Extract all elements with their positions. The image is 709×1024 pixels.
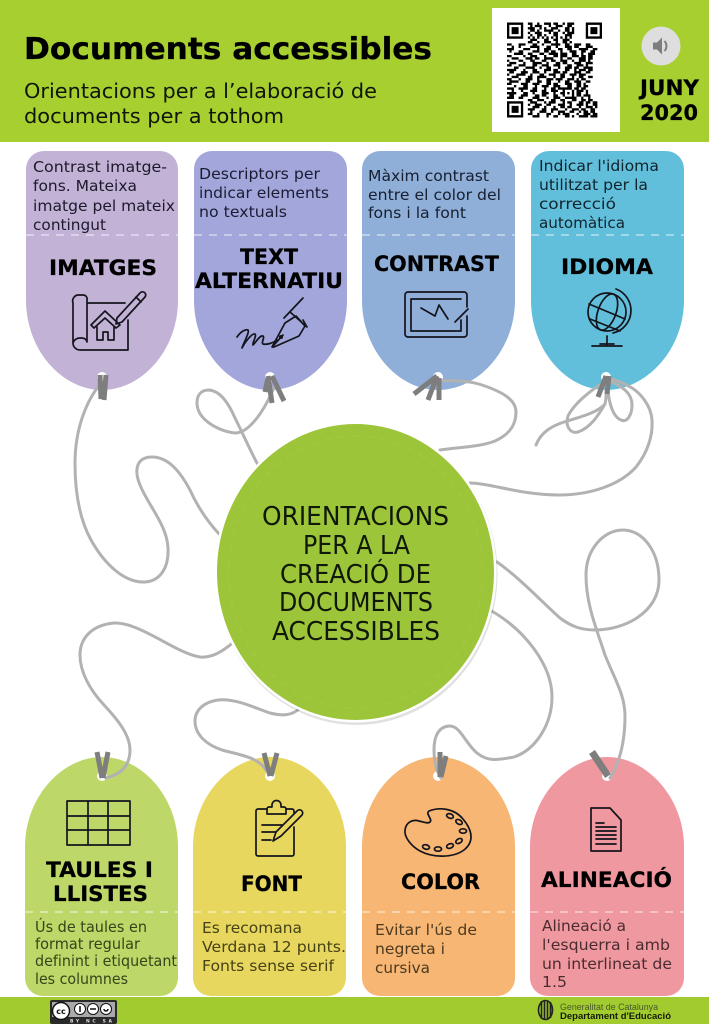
header band — [0, 0, 709, 142]
heading: contrast: CONTRAST — [374, 252, 500, 276]
panel: text alternatiu — [194, 151, 347, 390]
central text: CREACIÓ DE — [280, 558, 431, 590]
description: alineacio: l'esquerra i amb — [542, 936, 670, 954]
description: contrast: entre el color del — [368, 186, 501, 204]
heading: text alternatiu — [195, 245, 343, 293]
icon: speaker button — [642, 26, 680, 66]
description: taules i llistes — [35, 917, 177, 988]
description: contrast: Màxim contrast — [368, 167, 489, 185]
central text: DOCUMENTS — [279, 588, 433, 618]
panel: idioma — [531, 151, 684, 390]
description: idioma: automàtica — [539, 214, 625, 232]
description: imatges: contingut — [33, 216, 106, 234]
description: color: cursiva — [375, 959, 430, 977]
icon: table — [67, 801, 130, 845]
panel: imatges — [26, 151, 178, 390]
heading: imatges: IMATGES — [49, 256, 157, 280]
heading: color: COLOR — [401, 870, 480, 894]
strings connecting tags to centre — [75, 378, 659, 778]
central text — [262, 502, 449, 647]
description: text alternatiu: indicar elements — [199, 184, 329, 202]
heading: taules i llistes: LLISTES — [53, 882, 148, 906]
description: imatges: imatge pel mateix — [33, 197, 175, 215]
footer institution text: Generalitat de Catalunya — [560, 1002, 658, 1012]
central text: ACCESSIBLES — [272, 617, 440, 647]
description: contrast: fons i la font — [368, 204, 466, 222]
description: taules i llistes: definint i etiquetant — [35, 952, 177, 970]
description: text alternatiu — [199, 165, 329, 221]
footer institution text — [560, 1002, 671, 1022]
icon: clipboard — [256, 800, 303, 856]
panel: contrast — [362, 151, 515, 390]
heading: text alternatiu: ALTERNATIU — [195, 269, 343, 293]
central text: ORIENTACIONS — [262, 502, 449, 532]
date: JUNY — [638, 76, 700, 100]
description: imatges — [33, 158, 175, 234]
description: taules i llistes: format regular — [35, 935, 141, 953]
icon: creative commons badge: cc — [56, 1007, 66, 1016]
subtitle: Orientacions per a l’elaboració de — [24, 79, 377, 103]
description: idioma — [539, 157, 659, 232]
description: taules i llistes: Ús de taules en — [35, 917, 147, 936]
description: alineacio: un interlineat de — [542, 955, 672, 973]
heading: alineacio: ALINEACIÓ — [541, 867, 672, 892]
heading: font: FONT — [241, 872, 303, 896]
description: color: negreta i — [375, 940, 445, 958]
description: alineacio: 1.5 — [542, 973, 567, 991]
icon: palette — [405, 809, 471, 856]
description: text alternatiu: Descriptors per — [199, 165, 321, 183]
central circle — [214, 422, 498, 725]
description: imatges: Contrast imatge- — [33, 158, 167, 176]
description: color: Evitar l'ús de — [375, 921, 477, 939]
panel: taules i llistes — [25, 757, 178, 996]
description: font: Verdana 12 punts. — [202, 938, 346, 956]
icon: document — [591, 808, 621, 851]
heading: idioma: IDIOMA — [561, 255, 654, 279]
string clips — [97, 375, 609, 778]
icon: drawing tablet — [405, 292, 468, 337]
subtitle — [24, 79, 377, 128]
description: taules i llistes: les columnes — [35, 970, 128, 988]
icon: house plan — [73, 292, 146, 350]
title: Documents accessibles — [24, 32, 432, 67]
QR code — [492, 8, 620, 132]
heading: text alternatiu: TEXT — [240, 245, 299, 269]
icon: Generalitat logo — [538, 1000, 552, 1020]
tag holes — [97, 372, 612, 781]
description: imatges: fons. Mateixa — [33, 177, 137, 195]
description: contrast — [368, 167, 501, 222]
icon: creative commons badge — [50, 1000, 117, 1024]
description: idioma: Indicar l'idioma — [539, 157, 659, 175]
description: font: Fonts sense serif — [202, 957, 335, 975]
description: idioma: correcció — [539, 195, 616, 213]
icon: globe — [588, 289, 631, 346]
panel: font — [193, 757, 346, 996]
subtitle: documents per a tothom — [24, 104, 284, 128]
description: idioma: utilitzat per la — [539, 176, 648, 194]
description: alineacio — [542, 917, 672, 991]
central text: PER A LA — [303, 531, 410, 561]
description: color — [375, 921, 477, 977]
footer band — [0, 997, 709, 1024]
description: text alternatiu: no textuals — [199, 203, 287, 221]
description: alineacio: Alineació a — [542, 917, 626, 935]
heading: taules i llistes — [46, 858, 153, 906]
date: 2020 — [640, 101, 698, 125]
description: font: Es recomana — [202, 919, 302, 937]
heading: taules i llistes: TAULES I — [46, 858, 153, 882]
footer institution text: Departament d'Educació — [560, 1011, 671, 1022]
description: font — [202, 919, 346, 975]
date — [638, 76, 700, 125]
icon: pen signature — [237, 298, 307, 348]
panel: color — [362, 757, 515, 996]
panel: alineacio — [530, 757, 684, 996]
